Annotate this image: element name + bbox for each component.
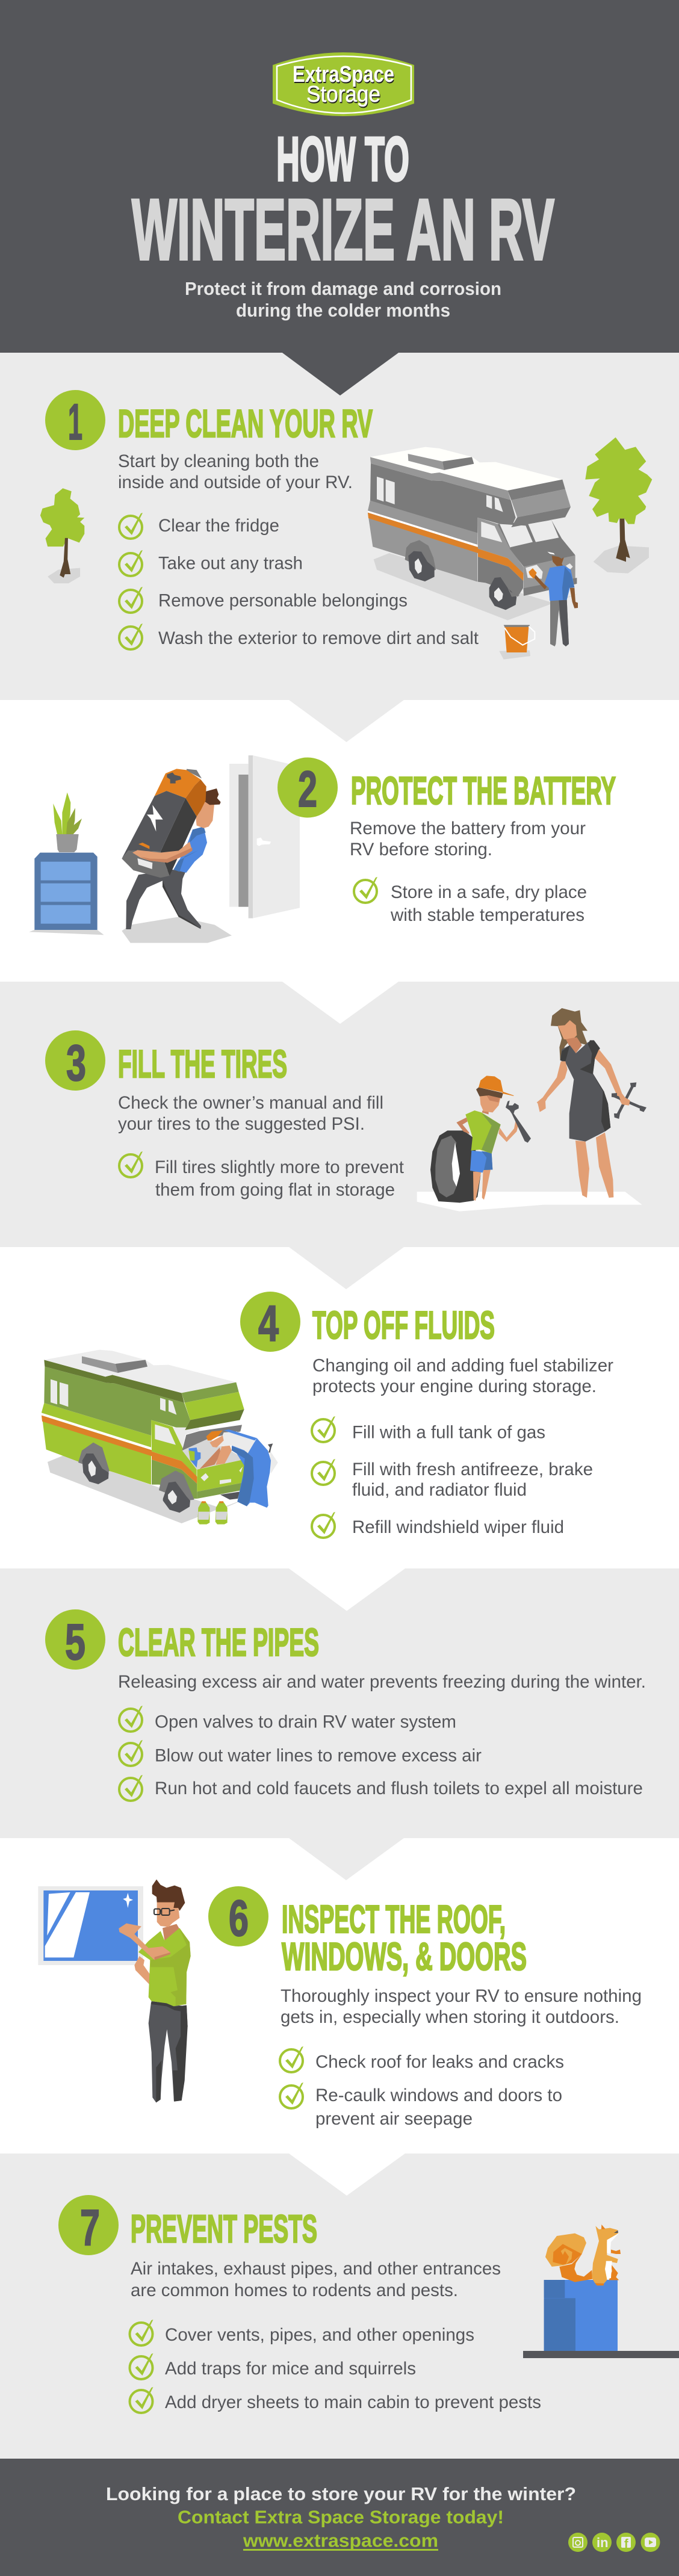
checklist step 6 bbox=[280, 2046, 564, 2129]
intro text step 4: Changing oil and adding fuel stabilizer bbox=[312, 1355, 613, 1376]
intro text step 1: inside and outside of your RV. bbox=[118, 472, 353, 492]
checklist step 7 bbox=[130, 2320, 541, 2413]
step number 7: 7 bbox=[80, 2199, 100, 2256]
arrow: step 1 pointer bbox=[289, 700, 404, 742]
social icons bbox=[568, 2533, 660, 2552]
intro text step 6: gets in, especially when storing it outdoors. bbox=[281, 2007, 619, 2027]
arrow: step 6 pointer bbox=[289, 2153, 405, 2196]
panel: step 1 deep clean bbox=[0, 353, 679, 700]
illustration: man at window bbox=[38, 1880, 191, 2102]
checklist step 5: Run hot and cold faucets and flush toilets to expel all moisture bbox=[155, 1779, 643, 1798]
checklist step 1 bbox=[119, 513, 479, 649]
checklist step 5 bbox=[119, 1706, 643, 1801]
checklist step 5: Open valves to drain RV water system bbox=[155, 1712, 456, 1732]
step number 4 bbox=[240, 1292, 300, 1352]
intro text step 2: Remove the battery from your bbox=[350, 819, 586, 838]
step number 6: 6 bbox=[229, 1890, 249, 1946]
intro text step 5: Releasing excess air and water prevents freezing during the winter. bbox=[118, 1672, 646, 1692]
arrow: step 4 pointer bbox=[289, 1568, 405, 1611]
subtitle: Protect it from damage and corrosion bbox=[185, 278, 501, 299]
intro text step 6 bbox=[281, 1986, 642, 2027]
logo: Extra Space Storage: ExtraSpace bbox=[293, 62, 394, 87]
checklist step 1: Remove personable belongings bbox=[158, 591, 408, 610]
step number 6 bbox=[208, 1886, 268, 1946]
illustration: gray RV with man washing bbox=[368, 438, 652, 660]
panel: step 6 inspect roof windows doors bbox=[0, 1838, 679, 2153]
intro text step 3 bbox=[118, 1093, 383, 1134]
subtitle: during the colder months bbox=[236, 300, 450, 321]
illustration: boy with tire and woman bbox=[417, 1008, 646, 1212]
checklist step 3 bbox=[119, 1151, 405, 1200]
intro text step 7: Air intakes, exhaust pipes, and other entrances bbox=[131, 2259, 501, 2279]
checklist step 2: with stable temperatures bbox=[390, 905, 584, 925]
checklist step 1: Clear the fridge bbox=[158, 516, 279, 536]
intro text step 4: protects your engine during storage. bbox=[312, 1376, 597, 1396]
intro text step 7: are common homes to rodents and pests. bbox=[131, 2280, 458, 2300]
heading: inspect the roof windows and doors bbox=[282, 1897, 527, 1978]
checklist step 1: Take out any trash bbox=[158, 554, 303, 573]
checklist step 2: Store in a safe, dry place bbox=[391, 882, 587, 902]
checklist step 7: Add traps for mice and squirrels bbox=[165, 2359, 416, 2379]
checklist step 7: Cover vents, pipes, and other openings bbox=[165, 2325, 474, 2345]
intro text step 7 bbox=[131, 2259, 501, 2300]
arrow: step 3 pointer bbox=[289, 1247, 404, 1289]
intro text step 3: your tires to the suggested PSI. bbox=[118, 1114, 365, 1134]
step number 5 bbox=[45, 1609, 105, 1670]
step number 2 bbox=[277, 757, 338, 817]
step number 5: 5 bbox=[65, 1614, 85, 1670]
panel: step 3 fill the tires bbox=[0, 982, 679, 1247]
step number 1: 1 bbox=[68, 394, 82, 450]
checklist step 4: fluid, and radiator fluid bbox=[352, 1480, 527, 1500]
checklist step 4: Refill windshield wiper fluid bbox=[352, 1517, 564, 1537]
heading: prevent pests: PREVENT PESTS bbox=[131, 2206, 317, 2251]
checklist step 5: Blow out water lines to remove excess air bbox=[155, 1745, 482, 1766]
intro text step 2: RV before storing. bbox=[350, 840, 492, 859]
intro text step 3: Check the owner’s manual and fill bbox=[118, 1093, 383, 1113]
illustration: man carrying battery bbox=[29, 755, 300, 943]
checklist step 6: prevent air seepage bbox=[315, 2109, 473, 2129]
arrow: header pointer bbox=[282, 353, 398, 395]
checklist step 3: Fill tires slightly more to prevent bbox=[155, 1157, 405, 1177]
panel: step 5 clear the pipes bbox=[0, 1568, 679, 1838]
checklist step 7: Add dryer sheets to main cabin to prevent pests bbox=[165, 2392, 541, 2412]
checklist step 6: Check roof for leaks and cracks bbox=[315, 2052, 564, 2072]
heading: top off fluids: TOP OFF FLUIDS bbox=[312, 1303, 495, 1347]
arrow: step 5 pointer bbox=[289, 1838, 404, 1880]
arrow: step 2 pointer bbox=[282, 982, 398, 1024]
checklist step 3: them from going flat in storage bbox=[155, 1180, 395, 1200]
step number 2: 2 bbox=[298, 761, 317, 817]
icon: youtube bbox=[640, 2533, 660, 2552]
checklist step 1: Wash the exterior to remove dirt and salt bbox=[158, 628, 479, 648]
checklist step 2 bbox=[354, 877, 587, 925]
heading: inspect the roof windows and doors: WINDOWS, & DOORS bbox=[282, 1934, 527, 1978]
panel: step 7 prevent pests bbox=[0, 2153, 679, 2459]
icon: linkedin: in bbox=[597, 2535, 609, 2550]
intro text step 1 bbox=[118, 451, 353, 492]
heading: deep clean your RV: DEEP CLEAN YOUR RV bbox=[118, 401, 373, 445]
checklist step 4: Fill with a full tank of gas bbox=[352, 1423, 545, 1442]
step number 7 bbox=[58, 2195, 119, 2256]
logo: Extra Space Storage: Storage bbox=[306, 82, 380, 107]
footer question: Looking for a place to store your RV for the winter? bbox=[106, 2483, 576, 2504]
heading: clear the pipes: CLEAR THE PIPES bbox=[118, 1620, 319, 1664]
panel: step 2 protect the battery bbox=[0, 700, 679, 982]
icon: linkedin bbox=[592, 2533, 612, 2552]
panel: footer call to action bbox=[0, 2459, 679, 2576]
heading: inspect the roof windows and doors: INSPECT THE ROOF, bbox=[282, 1897, 506, 1941]
illustration: green RV with mechanic bbox=[42, 1350, 278, 1525]
intro text step 1: Start by cleaning both the bbox=[118, 451, 319, 471]
heading: fill the tires: FILL THE TIRES bbox=[118, 1042, 287, 1086]
intro text step 4 bbox=[312, 1355, 613, 1396]
icon: instagram bbox=[568, 2533, 588, 2552]
step number 1 bbox=[45, 390, 105, 450]
step number 3 bbox=[45, 1030, 105, 1091]
title line 1: HOW TO bbox=[276, 125, 409, 194]
intro text step 6: Thoroughly inspect your RV to ensure nothing bbox=[281, 1986, 642, 2006]
logo: Extra Space Storage bbox=[273, 52, 414, 116]
checklist step 4: Fill with fresh antifreeze, brake bbox=[352, 1460, 593, 1479]
illustration: left tree bbox=[40, 488, 84, 583]
icon: facebook: f bbox=[624, 2537, 628, 2551]
checklist step 6: Re-caulk windows and doors to bbox=[315, 2085, 562, 2105]
step number 3: 3 bbox=[66, 1035, 86, 1091]
footer website link: www.extraspace.com bbox=[243, 2530, 438, 2551]
footer contact line: Contact Extra Space Storage today! bbox=[178, 2506, 504, 2528]
illustration: squirrel on blue box bbox=[523, 2225, 679, 2358]
subtitle bbox=[185, 278, 501, 321]
intro text step 2 bbox=[350, 819, 586, 859]
panel: step 4 top off fluids bbox=[0, 1247, 679, 1568]
step number 4: 4 bbox=[258, 1295, 279, 1352]
panel: header bbox=[0, 0, 679, 395]
checklist step 4 bbox=[312, 1416, 593, 1538]
icon: facebook bbox=[616, 2533, 636, 2552]
